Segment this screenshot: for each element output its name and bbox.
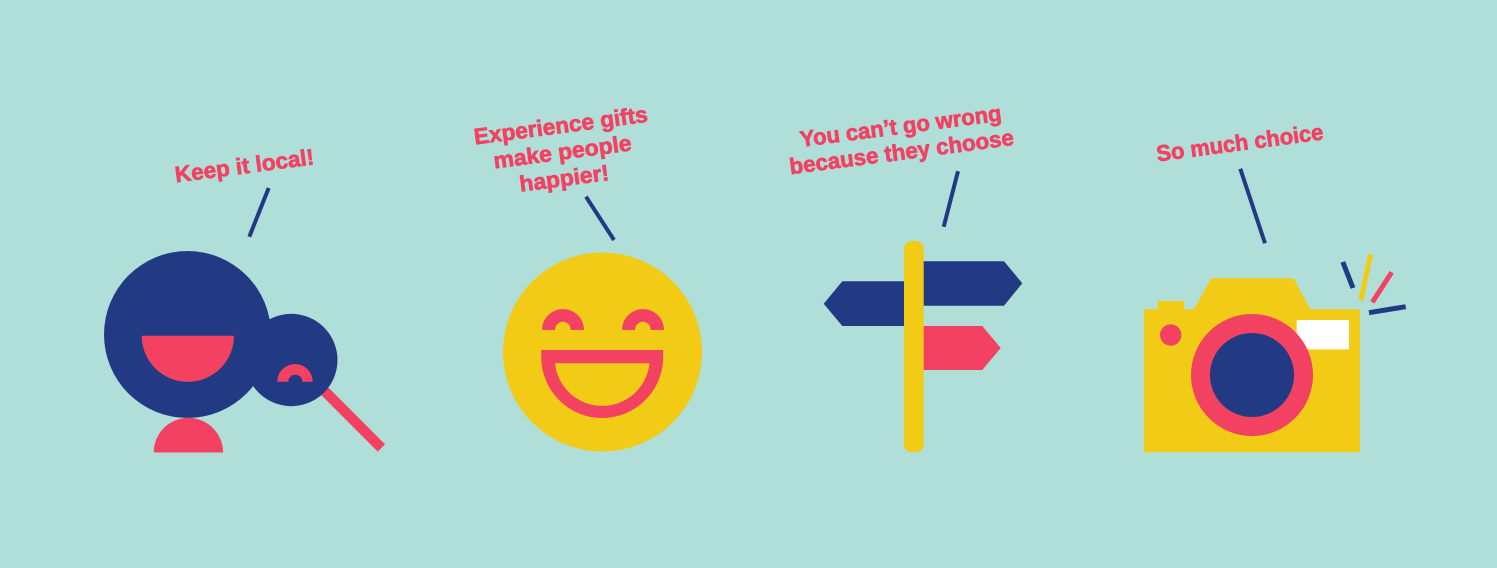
- heading: experience gifts make people happier: make people: [492, 131, 633, 173]
- heading: keep it local: Keep it local!: [173, 144, 315, 187]
- icon: flash rays: [1343, 254, 1406, 313]
- pointer line: [249, 188, 269, 237]
- icon: signpost: [824, 241, 1022, 452]
- pointer line: [586, 197, 614, 240]
- heading: experience gifts make people happier: [472, 102, 649, 197]
- heading: so much choice: So much choice: [1155, 119, 1325, 166]
- heading: experience gifts make people happier: Experience gifts: [472, 102, 649, 149]
- icon: laughing face: [503, 252, 702, 452]
- icon: camera: [1144, 278, 1360, 452]
- pointer line: [1240, 169, 1265, 243]
- pointer line: [944, 171, 958, 227]
- panel: experience gifts: [472, 102, 702, 452]
- heading: experience gifts make people happier: happier!: [518, 160, 610, 197]
- panel: so much choice: [1144, 119, 1406, 452]
- heading: you can't go wrong because they choose: [788, 101, 1015, 179]
- icon: person with magnifying glass: [104, 251, 381, 452]
- heading: you can't go wrong because they choose: You can’t go wrong: [798, 101, 1003, 152]
- heading: you can't go wrong because they choose: because they choose: [788, 125, 1015, 179]
- panel: you can't go wrong: [788, 101, 1022, 452]
- panel: keep it local: [104, 144, 381, 452]
